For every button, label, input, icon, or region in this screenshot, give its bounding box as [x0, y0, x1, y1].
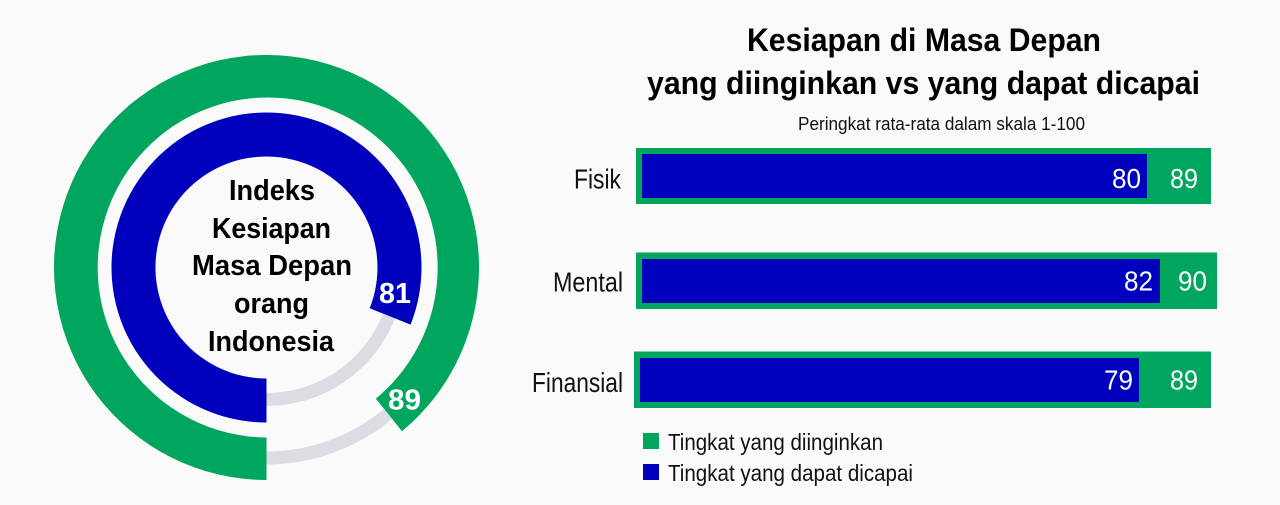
panel: readiness index donut [54, 55, 479, 480]
value label 89: 89 [388, 384, 421, 416]
chart title [647, 22, 1200, 101]
chart title: yang diinginkan vs yang dapat dicapai [647, 65, 1200, 101]
donut centre title: Kesiapan [212, 213, 331, 245]
legend: Tingkat yang diinginkan [668, 429, 883, 455]
grey track: outer ring remainder [266, 414, 388, 458]
green ring: desired level 89 [54, 55, 479, 480]
bar row: Fisik [574, 148, 1211, 204]
value label 81: 81 [379, 278, 411, 310]
donut centre title: Indeks [229, 175, 315, 207]
blue ring: achievable level 81 [112, 112, 422, 422]
bar row: Fisik: Fisik [574, 164, 621, 194]
legend [643, 429, 913, 486]
chart title: Kesiapan di Masa Depan [747, 22, 1101, 58]
legend: Tingkat yang dapat dicapai [668, 460, 913, 486]
bar row: Mental: 90 [1178, 266, 1207, 296]
bar row: Mental: 82 [1124, 266, 1153, 296]
donut centre title [192, 175, 352, 358]
bar row: Finansial: Finansial [532, 367, 623, 398]
bar row: Fisik: 80 [1112, 163, 1141, 194]
grey track: inner ring remainder [266, 316, 389, 400]
bar row: Finansial: 89 [1170, 364, 1198, 396]
chart subtitle: Peringkat rata-rata dalam skala 1-100 [798, 113, 1085, 134]
donut centre title: orang [234, 288, 309, 320]
bar row: Finansial [532, 352, 1211, 408]
donut centre title: Masa Depan [192, 250, 352, 282]
bar row: Mental: Mental [553, 266, 623, 298]
donut centre title: Indonesia [208, 326, 335, 358]
bar row: Mental [553, 252, 1217, 309]
bar row: Fisik: 89 [1170, 163, 1198, 194]
bar row: Finansial: 79 [1104, 364, 1133, 396]
